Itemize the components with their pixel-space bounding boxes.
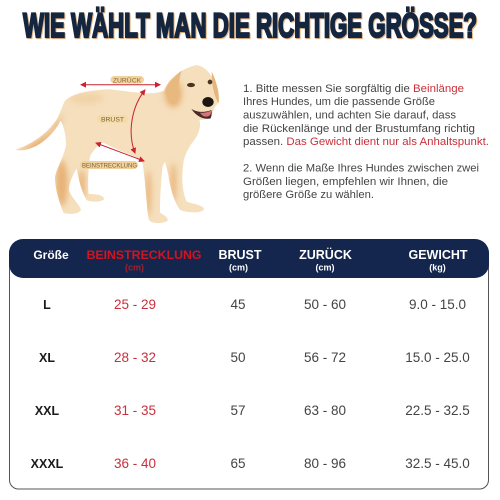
label: BRUST [97, 115, 128, 124]
header: BEINSTRECKLUNG: BEINSTRECKLUNG [86, 248, 202, 262]
instructions text: 1. Bitte messen Sie sorgfältig die Beinlänge [243, 83, 464, 95]
instructions text: passen. Das Gewicht dient nur als Anhaltspunkt. [243, 136, 489, 148]
arrow: back [81, 84, 160, 86]
weight values: 22.5 - 32.5 [405, 403, 470, 418]
instructions text: größere Größe zu wählen. [243, 189, 374, 201]
icon: dog eyes [187, 80, 212, 87]
icon: dog body [16, 65, 219, 223]
leg length values [114, 297, 156, 471]
arrow: leg [96, 143, 144, 161]
leg length values: 31 - 35 [114, 403, 156, 418]
header: BEINSTRECKLUNG [86, 248, 202, 272]
fur shading [17, 79, 182, 217]
label: BEINSTRECKLUNG: BEINSTRECKLUNG [82, 162, 137, 169]
label: BRUST: BRUST [101, 117, 124, 124]
back values: 63 - 80 [304, 403, 346, 418]
size labels: L [43, 298, 51, 312]
chest values: 45 [230, 297, 246, 312]
back values: 56 - 72 [304, 350, 346, 365]
back values: 80 - 96 [304, 456, 346, 471]
weight values: 32.5 - 45.0 [405, 456, 470, 471]
instructions text: auszuwählen, und achten Sie darauf, dass [243, 110, 457, 122]
label: ZURÜCK [110, 76, 144, 85]
arrow: chest [131, 90, 145, 153]
instructions text [243, 83, 489, 201]
icon: far ear [212, 72, 219, 103]
icon: dog nose [202, 97, 214, 107]
table outline [10, 245, 488, 489]
chest values: 50 [230, 350, 246, 365]
header: ZURÜCK [299, 247, 352, 272]
header: BEINSTRECKLUNG: (cm) [125, 262, 144, 272]
size table [9, 239, 489, 489]
back values: 50 - 60 [304, 297, 346, 312]
header: BRUST: BRUST [218, 248, 262, 262]
instructions text: 2. Wenn die Maße Ihres Hundes zwischen zwei [243, 162, 479, 174]
icon: dog photo [16, 65, 219, 223]
header: GEWICHT: GEWICHT [408, 248, 468, 262]
leg length values: 28 - 32 [114, 350, 156, 365]
leg length values: 36 - 40 [114, 456, 156, 471]
icon: dog mouth [191, 109, 212, 119]
back values [304, 297, 346, 471]
dog illustration with measurement marks [16, 65, 219, 223]
header: ZURÜCK: ZURÜCK [299, 247, 352, 262]
header: GEWICHT [408, 248, 468, 272]
icon: dog ear [165, 71, 182, 103]
size labels: XXL [35, 404, 60, 418]
weight values: 9.0 - 15.0 [409, 297, 466, 312]
instructions text: Ihres Hundes, um die passende Größe [243, 96, 435, 108]
table header band [9, 239, 489, 278]
chest values [230, 297, 246, 471]
weight values: 15.0 - 25.0 [405, 350, 470, 365]
header: ZURÜCK: (cm) [315, 262, 335, 272]
header: Größe: Größe [33, 248, 69, 262]
header: BRUST: (cm) [229, 262, 248, 272]
instructions text: Größen liegen, empfehlen wir Ihnen, die [243, 176, 448, 188]
size labels [31, 298, 64, 471]
header: GEWICHT: (kg) [429, 262, 446, 272]
label: ZURÜCK: ZURÜCK [113, 77, 142, 85]
instructions text: die Rückenlänge und der Brustumfang richtig [243, 123, 475, 135]
size labels: XXXL [31, 457, 64, 471]
size labels: XL [39, 351, 55, 365]
leg length values: 25 - 29 [114, 297, 156, 312]
chest values: 65 [230, 456, 246, 471]
header: BRUST [218, 248, 262, 272]
weight values [405, 297, 470, 471]
icon: tongue [200, 111, 211, 117]
chest values: 57 [230, 403, 246, 418]
